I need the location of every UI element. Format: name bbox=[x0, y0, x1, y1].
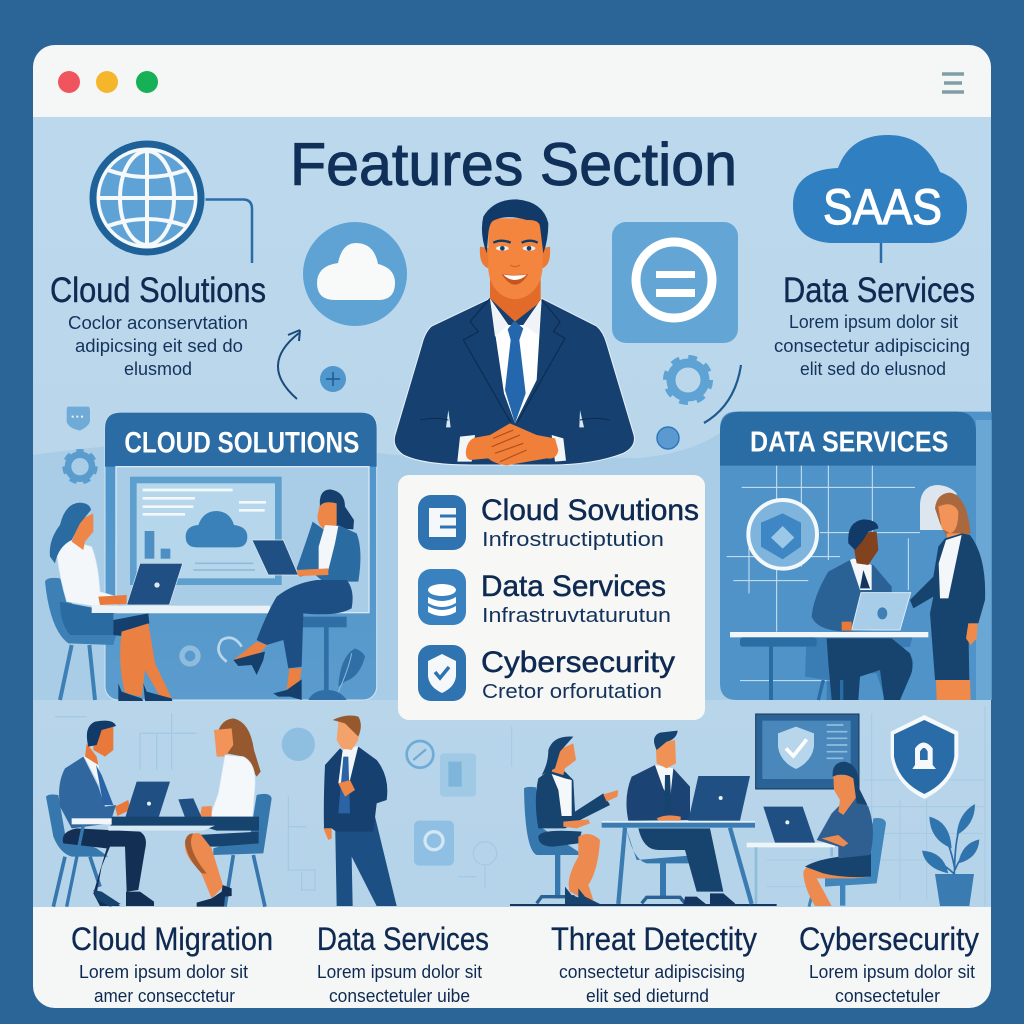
heading: data services: Data Services bbox=[783, 271, 975, 310]
caption: threat detection: elit sed dieturnd bbox=[586, 986, 709, 1006]
woman seated left bbox=[50, 503, 172, 701]
circuit grid bbox=[727, 466, 920, 681]
scene: threat detection team bbox=[510, 707, 985, 907]
icon: globe bbox=[93, 144, 252, 263]
caption: cybersecurity: consectetuler bbox=[835, 986, 940, 1006]
caption: cloud migration bbox=[71, 921, 273, 1006]
scene: meeting and walking man bbox=[46, 713, 497, 907]
caption: cloud migration: Cloud Migration bbox=[71, 921, 273, 957]
caption: threat detection: Threat Detectity bbox=[551, 921, 757, 957]
stool bbox=[300, 617, 347, 700]
icon: saas cloud: SAAS bbox=[823, 179, 942, 235]
man seated bbox=[59, 721, 154, 907]
office wall bbox=[116, 467, 369, 613]
caption: cloud migration: Lorem ipsum dolor sit bbox=[79, 962, 248, 982]
caption: data services bbox=[317, 921, 489, 1006]
panel: data services bbox=[720, 412, 992, 700]
woman three bbox=[803, 762, 873, 906]
icon: chat bubble bbox=[67, 407, 90, 431]
icon: dot and arc bbox=[657, 365, 741, 449]
meeting table with laptop bbox=[67, 782, 259, 907]
man two bbox=[626, 731, 735, 906]
feature: cybersecurity: Cretor orforutation bbox=[482, 681, 662, 703]
title: Features Section bbox=[290, 131, 737, 198]
feature: data services: Infrastruvtaturutun bbox=[482, 605, 671, 627]
feature: data services: Data Services bbox=[481, 570, 666, 603]
text block: cloud solutions: elusmod bbox=[124, 359, 192, 379]
feature: cloud solutions bbox=[418, 494, 699, 551]
presentation screen bbox=[130, 477, 282, 585]
seated man bbox=[805, 519, 913, 700]
feature: cybersecurity bbox=[418, 645, 675, 703]
caption: cybersecurity: Cybersecurity bbox=[799, 921, 979, 957]
potted plant bbox=[922, 804, 979, 906]
text block: data services: Lorem ipsum dolor sit bbox=[789, 312, 958, 332]
panel heading: DATA SERVICES bbox=[750, 427, 948, 459]
panel header bbox=[720, 412, 976, 466]
icon: menu tile bbox=[612, 222, 738, 343]
caption: threat detection bbox=[551, 921, 757, 1006]
laptop two bbox=[688, 776, 750, 821]
panel header bbox=[105, 413, 377, 467]
chair three bbox=[809, 818, 886, 907]
caption: cybersecurity bbox=[799, 921, 979, 1006]
feature: cybersecurity: Cybersecurity bbox=[481, 646, 675, 679]
faint background icons bbox=[55, 713, 497, 890]
icon: cloud circle bbox=[303, 222, 407, 326]
chair two bbox=[627, 830, 697, 903]
chair bbox=[45, 578, 117, 700]
desk bbox=[602, 821, 755, 904]
shield badge bbox=[891, 715, 958, 799]
laptop three bbox=[763, 807, 815, 843]
caption: threat detection: consectetur adipiscising bbox=[559, 962, 745, 982]
icon: arc and plus bbox=[278, 330, 346, 399]
security monitor bbox=[756, 714, 859, 789]
woman one bbox=[536, 736, 618, 904]
faint gears and plant bbox=[182, 638, 365, 692]
caption: cybersecurity: Lorem ipsum dolor sit bbox=[809, 962, 975, 982]
panel: feature list card bbox=[398, 475, 705, 720]
hexagon badge bbox=[748, 500, 817, 569]
faint grid bbox=[512, 707, 985, 907]
caption: data services: Data Services bbox=[317, 921, 489, 957]
heading: cloud solutions: Cloud Solutions bbox=[50, 271, 266, 310]
feature: data services bbox=[418, 569, 671, 627]
text block: data services: elit sed do elusnod bbox=[800, 359, 946, 379]
right chair bbox=[213, 794, 272, 907]
caption: cloud migration: amer consecctetur bbox=[94, 986, 235, 1006]
text block: data services bbox=[774, 312, 970, 379]
standing woman bbox=[910, 493, 985, 700]
feature: cloud solutions: Cloud Sovutions bbox=[481, 494, 699, 527]
floor line bbox=[510, 904, 777, 906]
caption: data services: Lorem ipsum dolor sit bbox=[317, 962, 482, 982]
icon: gear bbox=[666, 358, 710, 402]
text block: cloud solutions bbox=[68, 313, 248, 379]
caption: data services: consectetuler uibe bbox=[329, 986, 470, 1006]
table bbox=[92, 606, 270, 613]
chair one bbox=[524, 787, 578, 903]
icon: saas cloud bbox=[793, 135, 967, 263]
doorway bbox=[920, 485, 957, 530]
laptop left bbox=[127, 563, 183, 605]
icon: gear left bbox=[64, 451, 96, 482]
table bbox=[730, 632, 928, 700]
desk three bbox=[747, 843, 835, 904]
left chair bbox=[46, 794, 108, 907]
feature: cloud solutions: Infrostructiptution bbox=[482, 529, 664, 551]
window controls bbox=[58, 71, 964, 93]
text block: cloud solutions: Coclor aconservtation bbox=[68, 313, 248, 333]
walking man bbox=[323, 716, 397, 906]
panel: cloud solutions bbox=[45, 407, 377, 701]
presenter bbox=[394, 199, 634, 465]
text block: cloud solutions: adipicsing eit sed do bbox=[75, 336, 243, 356]
woman seated right bbox=[233, 489, 360, 700]
panel heading: CLOUD SOLUTIONS bbox=[124, 426, 359, 459]
text block: data services: consectetur adipiscicing bbox=[774, 336, 970, 356]
woman seated bbox=[178, 718, 261, 907]
